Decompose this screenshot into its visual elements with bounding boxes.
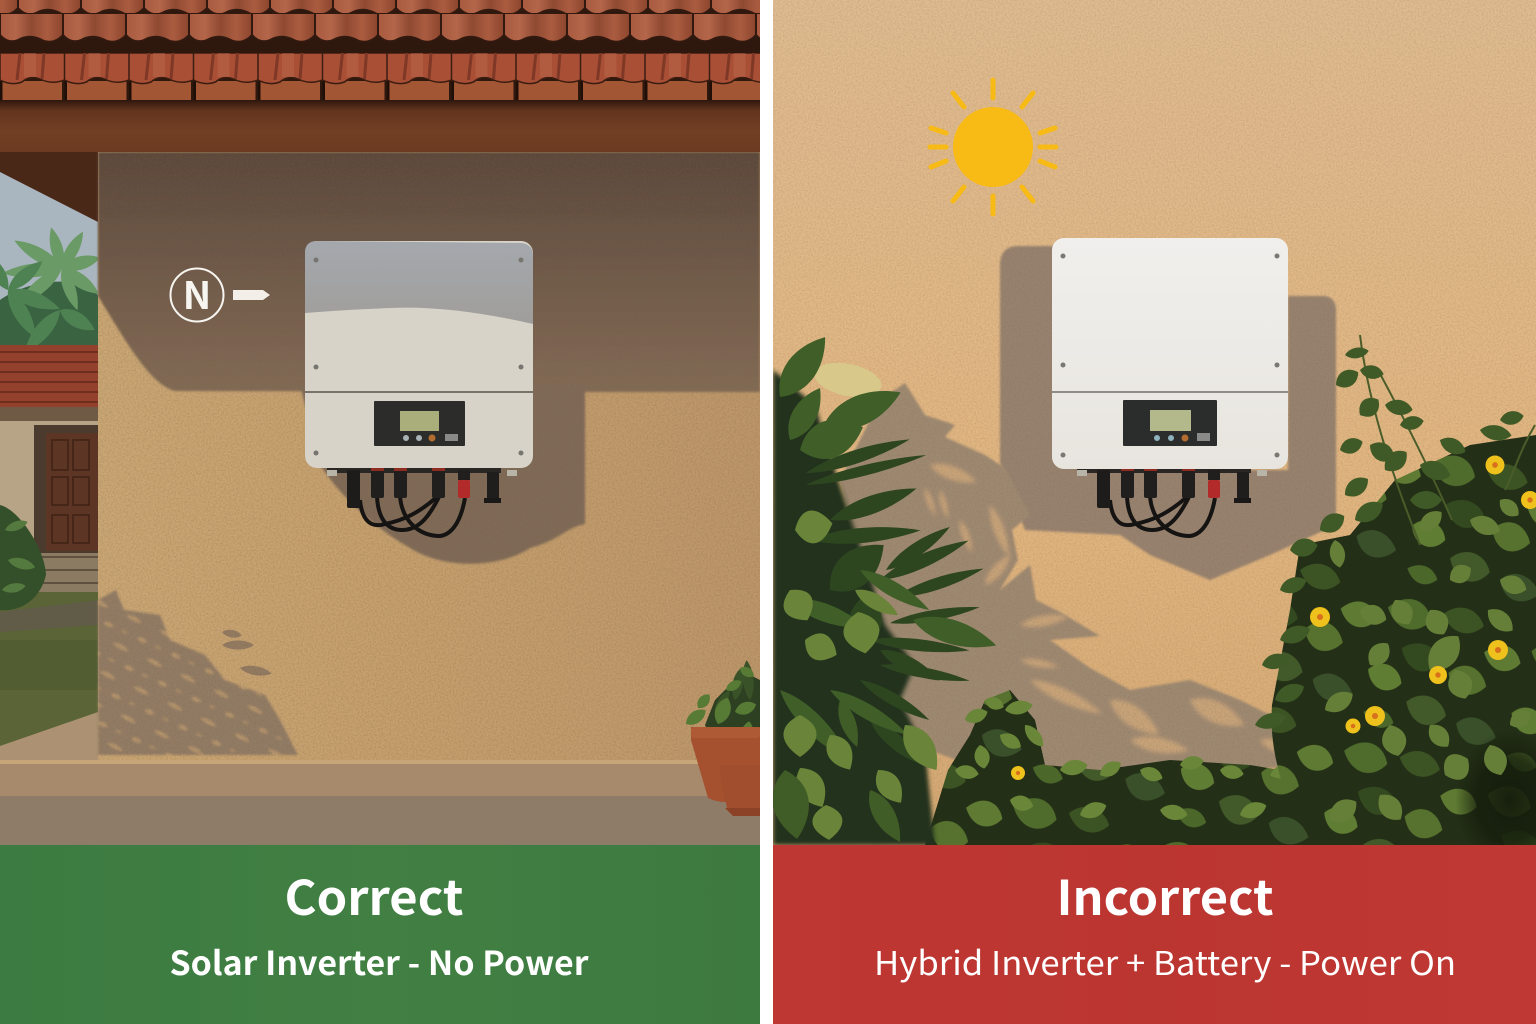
background view: sky, palms and neighbouring house	[0, 152, 103, 752]
inverter: left	[305, 241, 533, 536]
wall	[98, 152, 760, 762]
large leafy plant: left	[767, 328, 1000, 847]
roof shadow on wall	[98, 152, 760, 392]
subtitle: hybrid inverter: Hybrid Inverter + Battery - Power On	[874, 937, 1456, 985]
heading: correct: Correct	[284, 859, 464, 929]
plinth step	[0, 760, 760, 796]
arrow	[233, 290, 270, 300]
panel: incorrect caption bar	[773, 845, 1536, 1024]
flower	[1011, 766, 1025, 780]
pale lit leaf behind	[815, 363, 882, 397]
panel: correct installation scene	[0, 0, 760, 845]
roof tiles	[0, 0, 760, 101]
walkway slab	[0, 712, 98, 765]
foliage shadow on wall	[840, 383, 1310, 775]
heading: incorrect: Incorrect	[1056, 859, 1274, 929]
flowering shrub: right	[1253, 335, 1536, 870]
low bushes along wall	[925, 690, 1330, 845]
soffit beam	[0, 152, 98, 222]
icon: sun	[930, 80, 1056, 214]
wall	[773, 0, 1536, 845]
inverter: right	[1052, 238, 1288, 536]
inverter cast shadow	[300, 385, 585, 564]
inverter shadow	[1000, 246, 1336, 580]
compass: north marker	[170, 265, 270, 322]
panel: correct caption bar	[0, 845, 760, 1024]
panel: incorrect installation scene	[767, 0, 1536, 870]
wall texture	[98, 152, 760, 760]
compass: north marker: N	[183, 265, 211, 320]
foliage shadow on wall	[98, 590, 298, 755]
fascia board	[0, 100, 760, 152]
ground	[0, 796, 760, 845]
wall texture	[773, 0, 1536, 845]
potted plants	[683, 660, 760, 816]
subtitle: solar inverter: Solar Inverter - No Power	[170, 937, 589, 985]
yellow flowers	[1310, 456, 1536, 734]
